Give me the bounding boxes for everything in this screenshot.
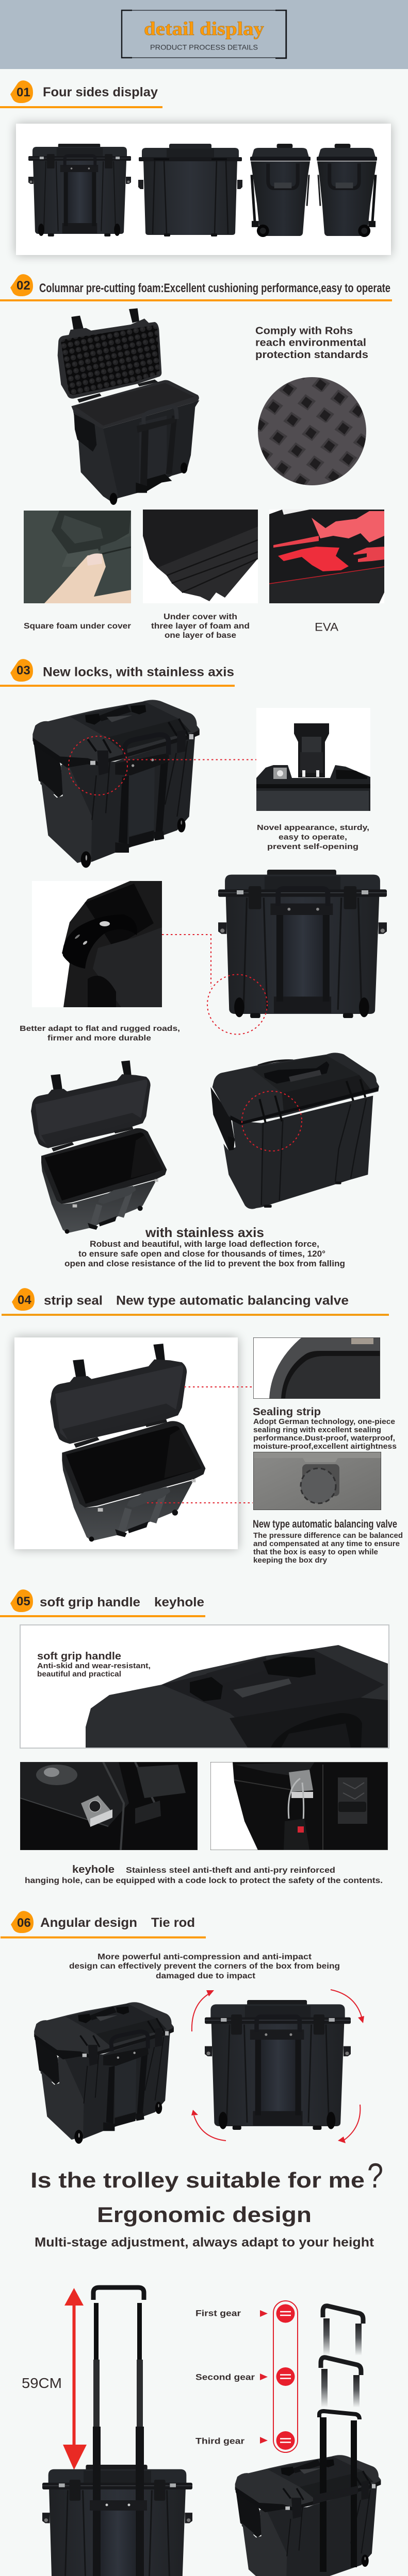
- title: is the trolley suitable: [30, 2156, 383, 2195]
- section 06 heading: 06: [17, 1916, 31, 1930]
- section 05 heading: [0, 1589, 205, 1617]
- text: balancing valve: and compensated at any time to ensure: [253, 1540, 400, 1548]
- text: sealing strip: [253, 1406, 397, 1451]
- trolley: first gear handle: [323, 2306, 363, 2355]
- section 02 heading: 02: [17, 279, 30, 293]
- section 01 heading: [0, 80, 162, 108]
- text: comply with Rohs: [255, 326, 368, 361]
- text: angular design: More powerful anti-compression and anti-impact: [97, 1953, 312, 1961]
- text: soft grip handle: Anti-skid and wear-resistant,: [37, 1662, 151, 1670]
- photo: lock closeup: [256, 708, 370, 811]
- gear labels: Third gear: [195, 2436, 244, 2446]
- section 04 heading: [2, 1288, 389, 1316]
- text: comply with Rohs: Comply with Rohs: [255, 326, 353, 337]
- section 04 heading: 04: [18, 1293, 31, 1307]
- section 06 heading: Tie rod: [151, 1916, 195, 1930]
- trolley: left full extension: [42, 2287, 192, 2576]
- gear labels: Second gear: [195, 2372, 255, 2382]
- text: angular design: [69, 1953, 340, 1980]
- case: back side: [138, 144, 242, 236]
- callout: lock circle and connector: [69, 736, 256, 795]
- section 03 heading: [0, 659, 235, 687]
- section 04 heading: New type automatic balancing valve: [116, 1293, 349, 1308]
- subtitle: PRODUCT PROCESS DETAILS: [150, 43, 258, 52]
- photo: balancing valve: [253, 1452, 381, 1510]
- text: sealing strip: performance.Dust-proof, waterproof,: [253, 1434, 395, 1443]
- captions: foam types: three layer of foam and: [151, 622, 250, 631]
- text: sealing strip: moisture-proof,excellent airtightness: [253, 1443, 397, 1451]
- caption: keyhole: keyhole: [72, 1864, 115, 1875]
- title: is the trolley suitable: Is the trolley suitable for me: [30, 2168, 365, 2192]
- caption: keyhole: Stainless steel anti-theft and anti-pry reinforced: [126, 1866, 335, 1875]
- captions: foam types: [24, 613, 338, 640]
- text: with stainless axis: open and close resistance of the lid to prevent the box from falling: [64, 1259, 345, 1268]
- panel: four sides display: [16, 124, 391, 255]
- text: with stainless axis: Robust and beautiful, with large load deflection force,: [90, 1239, 319, 1249]
- text: soft grip handle: [37, 1651, 151, 1679]
- text: with stainless axis: [64, 1225, 345, 1268]
- text: balancing valve: that the box is easy to open while: [253, 1548, 378, 1556]
- foam closeup circle: [258, 377, 366, 485]
- panel: open case: [14, 1337, 238, 1549]
- header band: [0, 0, 408, 69]
- case: right side: [317, 144, 377, 237]
- text: balancing valve: The pressure difference can be balanced: [253, 1532, 403, 1540]
- text: soft grip handle: soft grip handle: [37, 1651, 121, 1662]
- caption: better adapt: [20, 1024, 180, 1043]
- case: open empty: [31, 1060, 167, 1234]
- text: sealing strip: sealing ring with excellent sealing: [253, 1426, 381, 1434]
- caption: novel appearance: easy to operate,: [279, 833, 347, 842]
- text: soft grip handle: beautiful and practical: [37, 1670, 121, 1679]
- captions: foam types: Square foam under cover: [24, 622, 131, 631]
- case: back three-quarter view: [210, 1053, 379, 1209]
- arrow: 59cm height: [63, 2288, 87, 2470]
- caption: better adapt: Better adapt to flat and rugged roads,: [20, 1024, 180, 1033]
- title: ergonomic design: Ergonomic design: [97, 2202, 312, 2227]
- title: detail display: [144, 19, 265, 40]
- text: with stainless axis: with stainless axis: [145, 1225, 264, 1240]
- case: left side: [250, 144, 311, 237]
- section 01 heading: 01: [17, 86, 30, 99]
- section 05 heading: 05: [17, 1595, 30, 1608]
- section 02 heading: [0, 274, 392, 301]
- callout: seal connector: [184, 1386, 253, 1387]
- title: is the trolley suitable: ?: [367, 2156, 383, 2195]
- case: front view: [218, 870, 387, 1018]
- gear labels: First gear: [195, 2308, 241, 2318]
- open case with foam: [58, 308, 200, 505]
- photo: foam layers: [143, 510, 258, 603]
- case: three-quarter view: [34, 2002, 174, 2144]
- caption: novel appearance: Novel appearance, sturdy,: [257, 823, 369, 832]
- case: three-quarter view: [32, 700, 200, 868]
- photo: square foam: [24, 511, 131, 603]
- section 01 heading: Four sides display: [43, 85, 158, 99]
- case: trolley side: [28, 144, 131, 236]
- subtitle: multi-stage: Multi-stage adjustment, always adapt to your height: [35, 2235, 374, 2249]
- arrows: corner impact: [191, 1990, 364, 2143]
- section 03 heading: 03: [17, 664, 30, 677]
- section 06 heading: [1, 1911, 206, 1938]
- text: angular design: damaged due to impact: [156, 1972, 255, 1980]
- section 05 heading: soft grip handle: [40, 1595, 140, 1609]
- caption: novel appearance: prevent self-opening: [267, 842, 358, 851]
- text: angular design: design can effectively prevent the corners of the box from being: [69, 1962, 340, 1971]
- section 05 heading: keyhole: [154, 1595, 204, 1609]
- text: comply with Rohs: reach environmental: [255, 337, 366, 348]
- section 06 heading: Angular design: [40, 1916, 137, 1930]
- panel: soft grip handle: [20, 1624, 389, 1749]
- photo: keyhole with lock: [210, 1762, 388, 1850]
- label: 59CM: 59CM: [22, 2375, 62, 2391]
- photo: EVA: [269, 510, 384, 603]
- gear indicator: [260, 2301, 298, 2452]
- caption: novel appearance: [257, 823, 369, 851]
- caption: keyhole: hanging hole, can be equipped with a code lock to protect the safety of the contents.: [25, 1876, 383, 1885]
- trolley: right case with third gear: [235, 2411, 381, 2576]
- text: balancing valve: [253, 1518, 403, 1565]
- section 03 heading: New locks, with stainless axis: [43, 665, 234, 679]
- text: with stainless axis: to ensure safe open and close for thousands of times, 120°: [78, 1249, 325, 1259]
- photo: sealing strip: [253, 1337, 380, 1399]
- text: comply with Rohs: protection standards: [255, 349, 368, 361]
- caption: better adapt: firmer and more durable: [47, 1033, 151, 1043]
- case: front view: [205, 2000, 351, 2130]
- captions: foam types: one layer of base: [165, 631, 236, 640]
- callout: hinge circle: [242, 1091, 302, 1151]
- text: balancing valve: keeping the box dry: [253, 1556, 327, 1565]
- photo: wheel closeup: [32, 881, 162, 1007]
- gear labels: [195, 2308, 255, 2446]
- callout: wheel circle and connector: [162, 935, 267, 1035]
- text: sealing strip: Sealing strip: [253, 1406, 321, 1418]
- captions: foam types: EVA: [315, 620, 338, 634]
- trolley: second gear handle: [321, 2358, 361, 2408]
- callout: valve connector: [147, 1502, 253, 1503]
- captions: foam types: Under cover with: [164, 613, 237, 621]
- caption: keyhole: [25, 1864, 383, 1885]
- text: sealing strip: Adopt German technology, one-piece: [253, 1418, 395, 1426]
- photo: keyhole closeup: [20, 1762, 198, 1850]
- section 04 heading: strip seal: [44, 1293, 103, 1308]
